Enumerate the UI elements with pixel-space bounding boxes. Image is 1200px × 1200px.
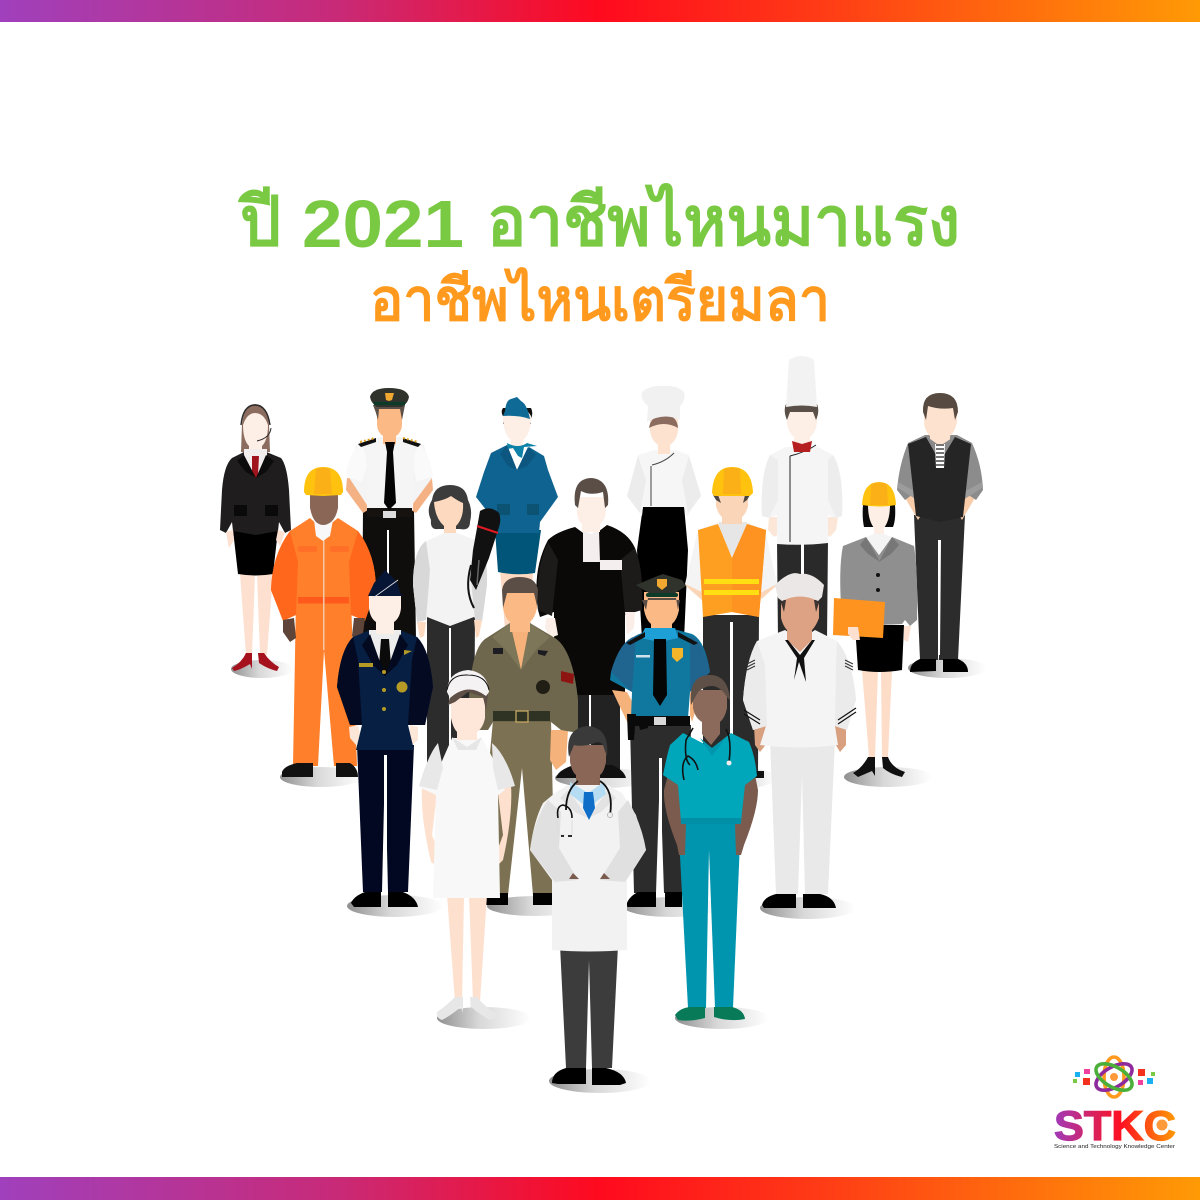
figure: woman in white shirt holding microphone [413,485,500,770]
figure: man in waistcoat [897,393,986,678]
title block [238,182,960,333]
logo wordmark: STKC [1054,1102,1176,1149]
heading line 1: อาชีพไหนมาแรง [487,182,960,260]
figure: construction worker in orange coverall [271,467,376,787]
heading line 2: อาชีพไหนเตรียมลา [370,267,830,333]
figure: nurse [419,670,531,1029]
top gradient bar [0,0,1200,22]
figure: sailor [743,573,856,919]
illustration: group of workers in uniform [220,356,983,1093]
logo: STKC [1054,1055,1176,1150]
figure: woman in grey suit with hard hat and folder [833,482,932,787]
figure: nurse in teal scrubs [663,675,769,1029]
logo dot [1156,1120,1168,1130]
icon: atom mark [1073,1057,1155,1097]
figure: receptionist [220,404,293,678]
heading line 1: ปี [238,184,281,260]
figure: police officer [610,574,720,917]
figure: air force officer [337,570,443,917]
figure: judge [536,478,651,788]
figure: flight attendant [476,397,558,640]
figure: doctor [530,726,651,1093]
bottom gradient bar [0,1177,1200,1200]
heading line 1 [238,182,960,262]
logo tagline: Science and Technology Knowledge Center [1054,1144,1175,1150]
figure: chef man [762,356,842,640]
figure: soldier in olive flight suit [469,577,583,916]
figure: chef woman [627,386,701,640]
heading line 1: 2021 [302,187,464,262]
figure: safety vest worker [685,467,777,788]
figure: pilot [346,388,433,640]
